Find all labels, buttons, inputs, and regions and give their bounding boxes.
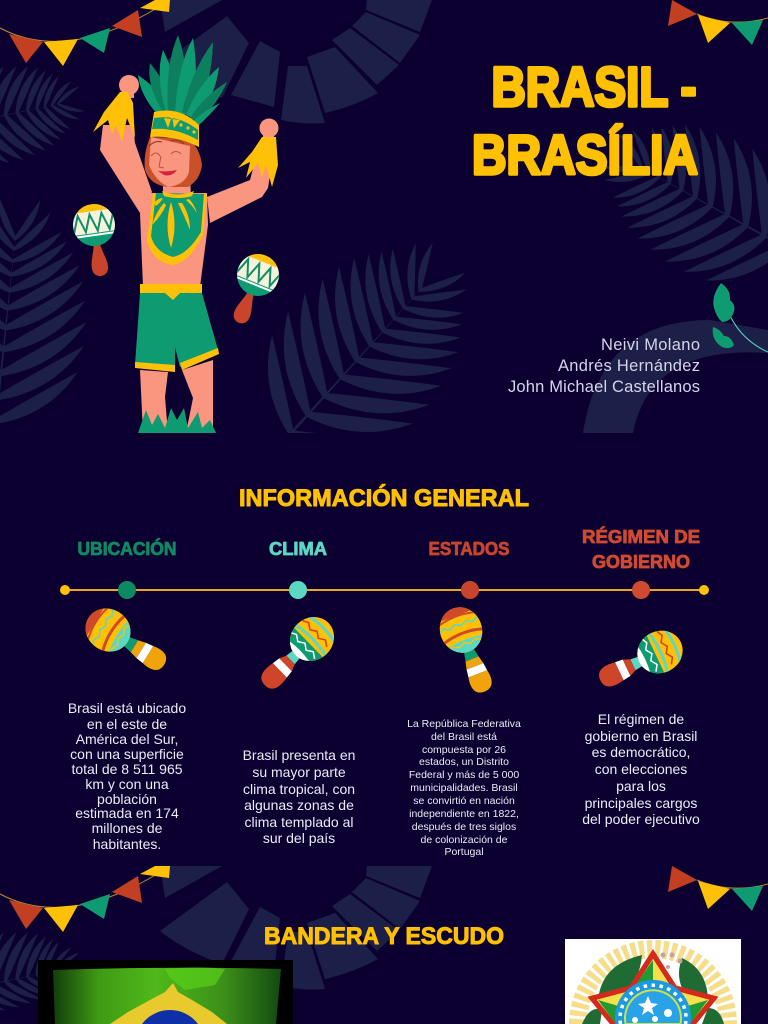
- icon: maraca clima: [249, 606, 345, 701]
- timeline line and nodes: [60, 581, 709, 599]
- text: clima: [243, 747, 355, 846]
- text: estados: independiente en 1822,: [409, 808, 519, 820]
- text: clima: Brasil presenta en: [243, 747, 355, 763]
- waist band: [140, 284, 202, 300]
- text: estados: La República Federativa: [407, 718, 521, 730]
- arch decoration top: [160, 0, 432, 124]
- text: clima: clima templado al: [245, 814, 353, 830]
- authors: Neivi Molano: [601, 336, 700, 354]
- title: BRASÍLIA: [472, 123, 698, 186]
- column headings: UBICACIÓN: [78, 538, 176, 559]
- text: clima: clima tropical, con: [243, 781, 355, 797]
- text: ubicación: millones de: [92, 820, 163, 836]
- image: coat of arms: [565, 939, 741, 1024]
- text: ubicación: total de 8 511 965: [71, 761, 183, 777]
- text: estados: municipalidades. Brasil: [410, 782, 518, 794]
- right arm: [207, 163, 270, 223]
- text: estados: Portugal: [444, 846, 484, 858]
- text: régimen: del poder ejecutivo: [582, 811, 700, 827]
- text: régimen: principales cargos: [585, 795, 697, 811]
- authors: [508, 338, 700, 392]
- left arm: [100, 125, 152, 213]
- text: clima: sur del país: [263, 830, 335, 846]
- icon: maraca estados: [432, 600, 505, 700]
- title: BRASIL -: [492, 55, 696, 118]
- palm leaves background: [0, 66, 768, 433]
- hands: [119, 75, 278, 140]
- image: flag: [38, 960, 293, 1024]
- text: estados: Federal y más de 5 000: [409, 769, 519, 781]
- authors: John Michael Castellanos: [508, 378, 700, 396]
- bunting left: [0, 0, 170, 66]
- authors: Andrés Hernández: [558, 357, 700, 375]
- column headings: GOBIERNO: [592, 552, 690, 572]
- grass: [138, 408, 216, 433]
- title: [474, 65, 698, 176]
- text: régimen: para los: [616, 778, 666, 794]
- text: clima: su mayor parte: [252, 764, 346, 780]
- eyes and mouth: [149, 140, 184, 175]
- text: clima: algunas zonas de: [244, 797, 354, 813]
- icon: green leaf branch: [713, 283, 768, 352]
- text: estados: compuesta por 26: [422, 744, 506, 756]
- column headings: ESTADOS: [428, 539, 510, 559]
- text: ubicación: estimada en 174: [75, 805, 179, 821]
- panel: cover: [0, 0, 768, 433]
- text: ubicación: población: [97, 791, 157, 807]
- panel: timeline: [60, 526, 709, 858]
- bunting right: [668, 866, 768, 911]
- text: ubicación: con una superficie: [70, 746, 184, 762]
- text: estados: [407, 718, 521, 858]
- maraca left: [73, 204, 115, 276]
- text: estados: se convirtió en nación: [413, 795, 515, 807]
- figure: dancer: [70, 35, 285, 433]
- hair: [145, 137, 202, 187]
- neck: [163, 185, 191, 193]
- legs: [140, 360, 213, 433]
- shorts hems: [135, 348, 219, 372]
- bib necklace: [147, 191, 207, 265]
- text: estados: después de tres siglos: [412, 821, 516, 833]
- text: estados: estados, un Distrito: [419, 756, 509, 768]
- text: régimen: gobierno en Brasil: [585, 728, 697, 744]
- text: ubicación: km y con una: [85, 776, 169, 792]
- icon: maraca régimen: [591, 622, 691, 700]
- text: ubicación: habitantes.: [93, 836, 161, 852]
- headband: [150, 111, 199, 147]
- column headings: CLIMA: [269, 539, 327, 559]
- text: régimen: El régimen de: [598, 711, 684, 727]
- heading: bandera y escudo: BANDERA Y ESCUDO: [264, 923, 504, 950]
- text: ubicación: en el este de: [87, 716, 167, 732]
- palm leaf background: [0, 918, 88, 1022]
- shorts: [135, 293, 218, 370]
- panel: bandera y escudo: [0, 866, 768, 1024]
- bunting right: [668, 0, 768, 45]
- text: régimen: con elecciones: [595, 761, 687, 777]
- text: régimen: es democrático,: [592, 744, 690, 760]
- maraca right: [234, 254, 279, 324]
- text: estados: del Brasil está: [431, 731, 497, 743]
- right wrist feathers: [238, 137, 278, 187]
- column headings: [78, 526, 700, 572]
- text: ubicación: América del Sur,: [76, 731, 178, 747]
- bunting left: [0, 866, 170, 932]
- torso: [140, 193, 208, 287]
- icon: maraca ubicación: [76, 599, 176, 683]
- arch decoration: [160, 866, 432, 990]
- face: [149, 137, 190, 187]
- column headings: RÉGIMEN DE: [582, 526, 700, 547]
- text: régimen: [582, 711, 700, 827]
- heading: información general: INFORMACIÓN GENERAL: [239, 484, 529, 512]
- arch decoration bottom right: [583, 320, 768, 433]
- left wrist feathers: [93, 92, 135, 142]
- text: estados: de colonización de: [421, 834, 508, 846]
- text: ubicación: Brasil está ubicado: [68, 700, 186, 716]
- feather headdress: [138, 35, 227, 126]
- text: ubicación: [68, 700, 186, 852]
